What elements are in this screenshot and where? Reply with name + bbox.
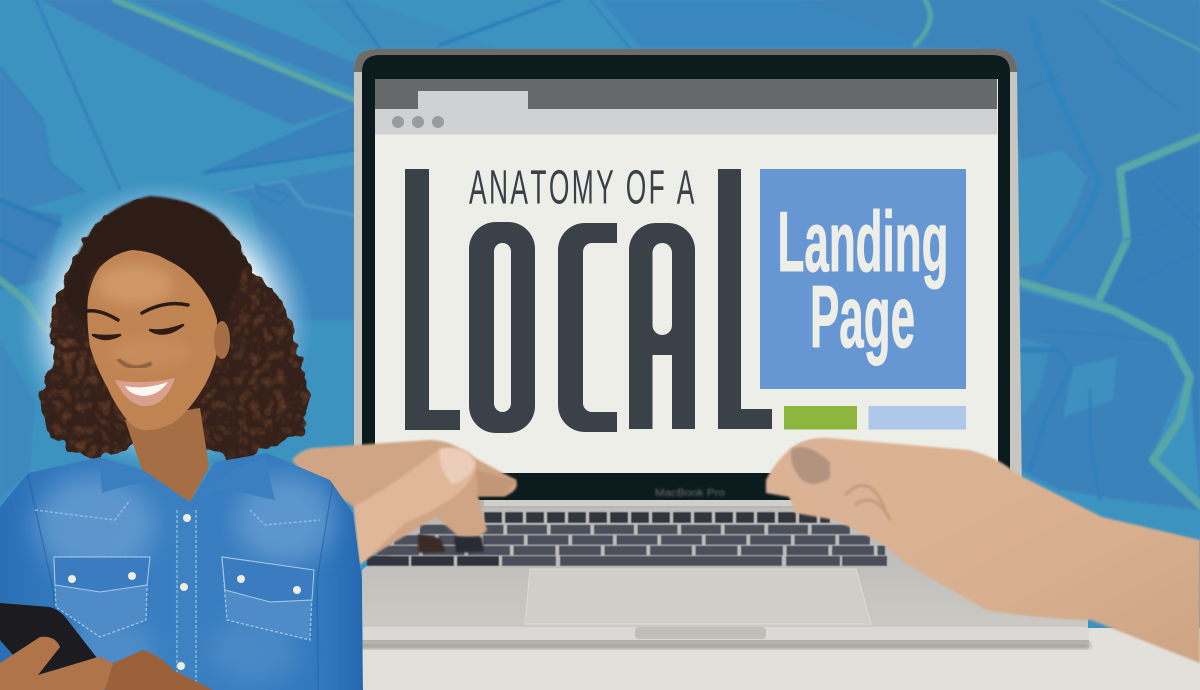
- phone: [0, 603, 97, 678]
- denim shirt: [0, 433, 363, 690]
- eyes: [93, 325, 183, 339]
- neck: [125, 408, 209, 502]
- hair: [41, 196, 308, 465]
- person: [0, 196, 363, 690]
- right hand on keyboard: [766, 438, 1200, 663]
- placket: [176, 510, 197, 690]
- heading: local: LOCAL: [403, 93, 777, 517]
- sleeve seams: [28, 475, 333, 690]
- laptop lid: [354, 49, 1022, 500]
- laptop lid: MacBook Pro: [655, 488, 726, 499]
- browser dots: [392, 116, 444, 128]
- browser window screen: [375, 79, 998, 473]
- left hand on keyboard: [292, 440, 517, 565]
- heading: anatomy of a: ANATOMY OF A: [469, 161, 697, 215]
- trackpad: [525, 569, 871, 624]
- blue title panel: [760, 169, 966, 389]
- front notch: [635, 627, 766, 639]
- eyebrows: [87, 304, 188, 320]
- hands holding phone: [0, 637, 213, 690]
- green accent block: [784, 406, 857, 430]
- laptop: [354, 49, 1089, 642]
- blue title panel: Page: [810, 267, 915, 366]
- right pocket: [222, 557, 313, 640]
- table surface: [355, 628, 1200, 690]
- mouth: [115, 378, 175, 406]
- browser tab: [418, 91, 528, 109]
- left pocket: [54, 557, 148, 637]
- browser tab bar: [375, 79, 997, 109]
- browser address bar: [375, 109, 997, 134]
- keyboard: [366, 508, 895, 568]
- landing: Landing: [778, 195, 948, 290]
- buttons: [68, 514, 301, 670]
- face: [87, 250, 230, 430]
- person glow: [17, 180, 313, 470]
- collar: [101, 470, 189, 502]
- chest yokes: [35, 500, 320, 525]
- laptop base and keyboard: [361, 500, 1089, 642]
- nose: [119, 360, 150, 367]
- light blue accent block: [868, 406, 966, 430]
